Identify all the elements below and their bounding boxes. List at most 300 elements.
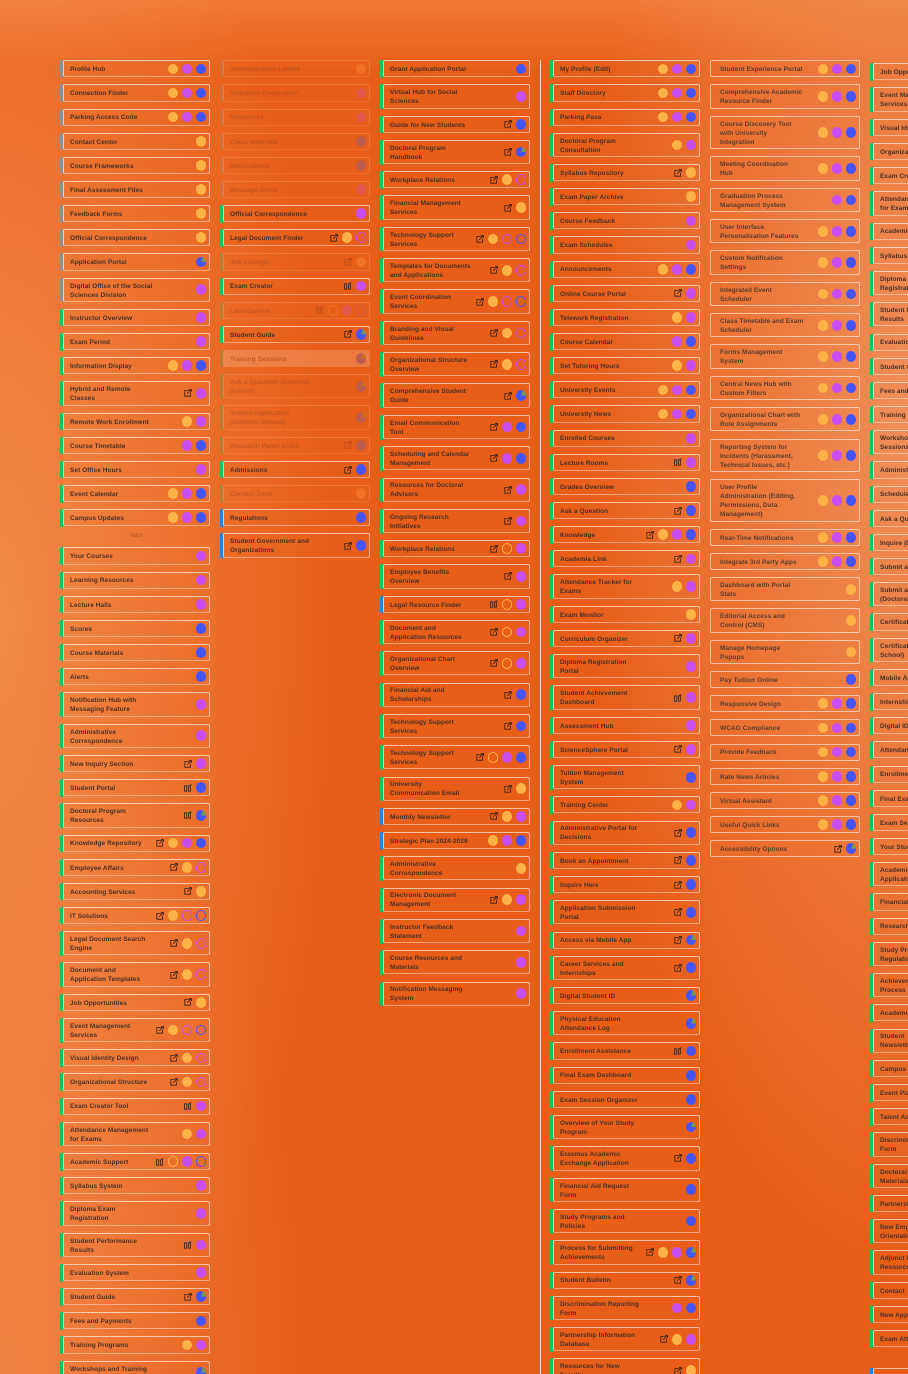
card: Discrimination Form: Form: [880, 1146, 896, 1153]
card: Attendance Management for Exams: Attendance Management: [70, 1127, 148, 1134]
card: Assessment Hub: Assessment Hub: [560, 723, 614, 730]
card: Final Exams: [873, 790, 908, 807]
card: Technology Support Services: Technology Support: [390, 232, 454, 239]
card: Exam Creator Tool: [873, 167, 908, 184]
card: Document and Application Resources: [383, 620, 530, 644]
card: Admissions: [223, 461, 370, 478]
card: Student Performance Results: Results: [70, 1247, 94, 1254]
faded card: Resources: [223, 109, 370, 126]
card: Digital ID: [873, 717, 908, 734]
card: Doctoral Program Consultation: Consultation: [560, 147, 600, 154]
faded card: Administrative Letters: Administrative Letters: [230, 66, 300, 73]
card: Process for Submitting Achievements: Process for Submitting: [560, 1245, 633, 1252]
card: Announcements: Announcements: [560, 266, 612, 273]
card: Organizational Chart Overview: Overview: [390, 665, 419, 672]
card: Academic Support: [63, 1153, 210, 1170]
card: Event Coordination Services: Services: [390, 303, 417, 310]
faded card: Research Panel SCNA: Research Panel SCNA: [230, 443, 300, 450]
card: Accessibility Options: [710, 840, 860, 857]
card: Manage Homepage Popups: Manage Homepage: [720, 645, 780, 652]
faded card: Class Materials: [223, 133, 370, 150]
card: New Inquiry Section: [63, 755, 210, 772]
faded filled card: Training Sessions: [223, 350, 370, 367]
card: IT Solutions: IT Solutions: [70, 913, 108, 920]
card: Resources for New Faculty: Resources for New: [560, 1363, 620, 1370]
card: Comprehensive Student Guide: [383, 383, 530, 408]
card: Meeting Coordination Hub: Hub: [720, 170, 733, 177]
card: Inquire Here: Inquire Here: [560, 882, 599, 889]
card: Guide for New Students: [383, 116, 530, 133]
card: Exam Schedules: Exam Schedules: [560, 242, 613, 249]
card: Career Services and Internships: [553, 956, 700, 980]
card: Technology Support Services: Services: [390, 759, 417, 766]
card: New Employee Orientation: [873, 1219, 908, 1243]
faded card: LearnSphere: [223, 302, 370, 319]
card: Inquire (Doctoral School): [873, 534, 908, 551]
card: Electronic Document Management: [383, 888, 530, 912]
card: Comprehensive Academic Resource Finder: [710, 84, 860, 109]
card: Fees and Payments: [63, 1312, 210, 1329]
card: Certificates (Doctoral School): [873, 638, 908, 662]
card: Student Guide: [63, 1288, 210, 1305]
card: Branding and Visual Guidelines: Branding and Visual: [390, 326, 454, 333]
card: Scheduling and Calendar Management: Scheduling and Calendar: [390, 451, 469, 458]
card: Study Programs and Policies: [553, 1209, 700, 1233]
card: Instructor Feedback Statement: Instructor Feedback: [390, 924, 453, 931]
card: Discrimination Reporting Form: [553, 1296, 700, 1320]
card: Reporting System for Incidents: Incidents (Harassment,: [720, 453, 793, 460]
card: Provide Feedback: Provide Feedback: [720, 749, 777, 756]
card: Remote Work Enrollment: [63, 413, 210, 430]
card: Financial Aid and Scholarships: [383, 682, 530, 707]
card: Access via Mobile App: [553, 932, 700, 949]
card: Feedback Forms: [63, 205, 210, 222]
card: Scores: Scores: [70, 626, 92, 633]
card: Doctoral Materials: Materials: [880, 1178, 908, 1185]
card: Templates for Documents and Applications: Templates for Documents: [390, 263, 471, 270]
card: Administrative Correspondence: [63, 724, 210, 748]
card: Document and Application Resources: Document and: [390, 625, 436, 632]
card: Student Achievement Dashboard: Student Achievement: [560, 690, 627, 697]
column 6: clipped features: [870, 63, 908, 1374]
card: Administrative Correspondence: Correspondence: [390, 870, 442, 877]
card: Financial Aid: [873, 893, 908, 911]
card: Dashboard with Portal Stats: Stats: [720, 591, 736, 598]
card: Dashboard with Portal Stats: Dashboard with Portal: [720, 582, 790, 589]
card: Legal Document Search Engine: Engine: [70, 945, 92, 952]
card: Your Courses: [63, 547, 210, 565]
card: Online Course Portal: [553, 285, 700, 302]
card: My Profile (Edit): [553, 60, 700, 77]
card: Certificates (Doctoral School): School): [880, 652, 904, 659]
card: Learning Resources: [63, 572, 210, 589]
card: Real-Time Notifications: Real-Time Notifications: [720, 535, 794, 542]
card: Accounting Services: [63, 883, 210, 900]
card: Workplace Relations: Workplace Relations: [390, 177, 455, 184]
card: Comprehensive Student Guide: Guide: [390, 397, 409, 404]
card: Hybrid and Remote Classes: Classes: [70, 395, 95, 402]
card: Student Government and Organizations: Organizations: [230, 547, 274, 554]
card: Course Resources and Materials: Course Resources and: [390, 955, 462, 962]
card: Study Programs and Policies: Study Programs and: [560, 1214, 625, 1221]
card: Student Government and Organizations: Student Government and: [230, 538, 309, 545]
card: WCAG Compliance: [710, 719, 860, 736]
card: Resources for New Faculty: [553, 1358, 700, 1374]
card: Electronic Document Management: Electronic Document: [390, 892, 456, 899]
card: Scheduling and Calendar Management: Management: [390, 460, 430, 467]
card: Course Feedback: [553, 212, 700, 229]
card: Overview of Your Study Program: Overview of Your Study: [560, 1120, 634, 1127]
card: Forms Management System: [710, 344, 860, 369]
card: Final Assessment Files: Final Assessment Files: [70, 187, 143, 194]
card: Organizational Structure: Organizational Structure: [70, 1079, 147, 1086]
card: Electronic Document Management: Management: [390, 901, 430, 908]
card: Erasmus Academic Exchange Application: [553, 1146, 700, 1171]
card: University Events: [553, 381, 700, 398]
card: University Communication Email: University: [390, 781, 422, 788]
card: Book an Appointment: Book an Appointment: [560, 858, 628, 865]
faded card: Submit Application (Doctoral School): [223, 405, 370, 430]
card: Class Timetable and Exam Scheduler: Scheduler: [720, 327, 752, 334]
card: Notification Hub: Messaging Feature: [70, 706, 130, 713]
card: New Inquiry Section: New Inquiry Section: [70, 761, 133, 768]
card: Visual Identity Design: [63, 1049, 210, 1066]
card: Class Timetable and Exam Scheduler: Class Timetable and Exam: [720, 318, 803, 325]
card: Workplace Relations: Workplace Relations: [390, 546, 455, 553]
faded card: Contact Zone: [223, 485, 370, 502]
card: Profile Hub: [63, 60, 210, 77]
card: Training Center: [553, 796, 700, 813]
card: Virtual Hub for Social Sciences: Virtual Hub for Social: [390, 89, 457, 96]
card: Email Communication Tool: Email Communication: [390, 420, 459, 427]
card: Your Courses: Your Courses: [70, 553, 113, 560]
card: Study Programs and Policies: Policies: [560, 1223, 585, 1230]
card: Organizational Chart Overview: Organizational Chart: [390, 656, 455, 663]
card: Exam Monitor: Exam Monitor: [560, 612, 604, 619]
card: Technology Support Services: Services: [390, 728, 417, 735]
faded card: Ask a Question (Doctoral School): Ask a Question (Doctoral: [230, 379, 309, 386]
card: Grant Application Portal: Grant Application Portal: [390, 66, 466, 73]
faded card: Notifications: [223, 157, 370, 174]
card: Administrative Correspondence: Correspondence: [70, 738, 122, 745]
faded card: Ask a Question (Doctoral School): [223, 374, 370, 398]
card: Job Opportunities: Job Opportunities: [70, 1000, 127, 1007]
card: Evaluation System: Evaluation System: [70, 1270, 129, 1277]
card: Lecture Rooms: Lecture Rooms: [560, 460, 608, 467]
card: Knowledge Repository: Knowledge Repository: [70, 840, 142, 847]
card: Administrative Correspondence: Administrative: [390, 861, 436, 868]
card: Application Submission Portal: Portal: [560, 914, 579, 921]
card: Legal Resource Finder: [383, 596, 530, 613]
card: Legal Document Finder: [223, 229, 370, 246]
card: Hybrid and Remote Classes: Hybrid and Remote: [70, 386, 131, 393]
card: Parking Pass: [553, 109, 700, 126]
card: Rate News Articles: Rate News Articles: [720, 774, 779, 781]
card: Ongoing Research Initiatives: [383, 509, 530, 533]
card: University Communication Email: Communication Email: [390, 790, 459, 797]
card: Monthly Newsletter: [383, 808, 530, 825]
card: Submit an Application (Doctoral School): [873, 582, 908, 606]
card: Admissions: Admissions: [230, 467, 267, 474]
card: Organizational Structure: [873, 143, 908, 160]
card: Course Materials: [63, 644, 210, 661]
card: Useful Quick Links: [710, 816, 860, 833]
card: User Interface Personalization Features: User Interface: [720, 224, 764, 231]
card: Enrollment Assistance: Enrollment Assistance: [560, 1048, 631, 1055]
card: Organizational Chart with Role Assignments: [710, 407, 860, 431]
card: Enrollment: [873, 766, 908, 783]
card: Knowledge Repository: [63, 835, 210, 852]
card: Set Tutoring Hours: [553, 357, 700, 374]
card: Application Portal: Application Portal: [70, 259, 127, 266]
card: User Profile Administration: [710, 479, 860, 522]
card: Technology Support Services: [383, 227, 530, 251]
card: Lecture Rooms: [553, 454, 700, 471]
card: Staff Directory: Staff Directory: [560, 90, 606, 97]
card: Student Guide: [223, 326, 370, 343]
card: Integrate 3rd Party Apps: Integrate 3rd Party Apps: [720, 559, 797, 566]
card: Graduation Process Management System: [710, 188, 860, 212]
card: Ask a Question: Ask a Question: [560, 508, 608, 515]
card: Course Frameworks: [63, 157, 210, 174]
card: User Profile Administration: Permissions, Data: [720, 502, 777, 509]
card: Organizational Structure Overview: Overview: [390, 366, 419, 373]
card: Graduation Process Management System: Graduation Process: [720, 193, 783, 200]
card: Partnership Information Database: Database: [560, 1341, 589, 1348]
faded card: Submit Application (Doctoral School): Submit Application: [230, 410, 290, 417]
card: Attendance Tracker for Exams: Exams: [560, 588, 581, 595]
card: Student Newsletter: Student: [880, 1033, 905, 1040]
card: Forms Management System: Forms Management: [720, 349, 782, 356]
card: Career Services and Internships: Internships: [560, 970, 596, 977]
card: Doctoral Program Resources: Resources: [70, 817, 104, 824]
card: Curriculum Organizer: Curriculum Organizer: [560, 636, 628, 643]
card: Physical Education Attendance Log: Physical Education: [560, 1016, 621, 1023]
card: Internships: [873, 693, 908, 710]
card: Hybrid and Remote Classes: [63, 381, 210, 406]
card: Branding and Visual Guidelines: [383, 321, 530, 345]
card: Feedback Forms: Feedback Forms: [70, 211, 122, 218]
card: Strategic Plan 2024-2029: Strategic Plan 2024-2029: [390, 838, 468, 845]
card: Employee Benefits Overview: [383, 564, 530, 589]
card: Manage Homepage Popups: Popups: [720, 654, 744, 661]
card: Achievement Process: Process: [880, 987, 906, 994]
card: Student Bulletin: Student Bulletin: [560, 1277, 611, 1284]
card: Contact: Contact: [880, 1288, 905, 1295]
card: Fees and Payments: [873, 382, 908, 399]
card: Organizational Chart with Role Assignments: Role Assignments: [720, 421, 777, 428]
card: Virtual Hub for Social Sciences: [383, 84, 530, 109]
card: Student Portal: Student Portal: [70, 785, 115, 792]
card: Student Experience Portal: [710, 60, 860, 77]
card: Exam Period: Exam Period: [70, 339, 110, 346]
card: Real-Time Notifications: [710, 529, 860, 546]
faded card: Ask a Question (Doctoral School): School): [230, 388, 254, 395]
card: Lecture Halls: [63, 596, 210, 613]
card: Enrolled Courses: Enrolled Courses: [560, 435, 615, 442]
card: Doctoral Program Resources: Doctoral Program: [70, 808, 126, 815]
card: Ongoing Research Initiatives: Initiatives: [390, 523, 421, 530]
card: Workplace Relations: [383, 171, 530, 188]
card: Financial Management Services: Services: [390, 209, 417, 216]
card: Financial Management Services: Financial Management: [390, 200, 461, 207]
card: Training Programs: [873, 406, 908, 423]
card: Official Correspondence: Official Correspondence: [70, 235, 147, 242]
card: Course Frameworks: Course Frameworks: [70, 163, 134, 170]
card: Training Programs: Training Programs: [70, 1342, 128, 1349]
card: ScienceSphere Portal: [553, 741, 700, 758]
card: Erasmus Academic Exchange Application: Exchange Application: [560, 1160, 629, 1167]
card: Career Services and Internships: Career Services and: [560, 961, 624, 968]
card: New Applicants: [873, 1306, 908, 1323]
card: University Events: University Events: [560, 387, 616, 394]
card: Enrolled Courses: [553, 430, 700, 447]
card: Final Assessment Files: [63, 181, 210, 198]
card: Event Calendar: [63, 485, 210, 502]
card: Rate News Articles: [710, 768, 860, 785]
card: Syllabus Repository: [553, 164, 700, 181]
card: Diploma Registration Portal: [553, 654, 700, 678]
card: Workshops and Training Sessions: Workshops and Training: [70, 1366, 147, 1373]
card: Course Discovery Tool: with University: [720, 130, 767, 137]
card: Book an Appointment: [553, 852, 700, 869]
faded card: Message Alerts: [223, 181, 370, 198]
card: Central News Hub with Custom Filters: Central News Hub with: [720, 381, 792, 388]
card: Financial Management Services: [383, 195, 530, 220]
card: Dashboard with Portal Stats: [710, 577, 860, 601]
card: Exam Creator: [223, 278, 370, 295]
card: Integrated Event Scheduler: [710, 282, 860, 306]
card: Student Achievement Dashboard: [553, 685, 700, 710]
card: Official Correspondence: Official Correspondence: [230, 211, 307, 218]
card: Digital Student ID: [553, 987, 700, 1004]
card: Email Communication Tool: [383, 415, 530, 439]
card: Training Center: Training Center: [560, 802, 609, 809]
card: Instructor Overview: Instructor Overview: [70, 315, 132, 322]
column 2: features: [220, 60, 370, 558]
card: Central News Hub with Custom Filters: [710, 376, 860, 400]
card: Final Exam Dashboard: Final Exam Dashboard: [560, 1072, 631, 1079]
card: Financial Aid and Scholarships: Scholarships: [390, 696, 432, 703]
card: Doctoral Program Consultation: [553, 133, 700, 157]
card: Employee Affairs: Employee Affairs: [70, 865, 124, 872]
card: WCAG Compliance: WCAG Compliance: [720, 725, 780, 732]
card: Editorial Access and Control (CMS): Control (CMS): [720, 622, 764, 629]
card: Digital Student ID: Digital Student ID: [560, 993, 615, 1000]
card: Responsive Design: [710, 695, 860, 712]
faded card: Contact Zone: Contact Zone: [230, 491, 272, 498]
card: Syllabus System: [873, 247, 908, 264]
card: Syllabus Repository: Syllabus Repository: [560, 170, 624, 177]
card: Grant Application Portal: [383, 60, 530, 77]
card: Erasmus Academic Exchange Application: Erasmus Academic: [560, 1151, 621, 1158]
card: Notification Messaging System: [383, 982, 530, 1006]
card: Financial Aid and Scholarships: Financial Aid and: [390, 687, 445, 694]
card: Technology Support Services: Technology Support: [390, 719, 454, 726]
card: Exam Paper Archive: [553, 188, 700, 205]
card: Mobile App: [873, 669, 908, 686]
card: Grades Overview: [553, 478, 700, 495]
card: Tuition Management System: [553, 765, 700, 789]
card: Grades Overview: Grades Overview: [560, 484, 614, 491]
card: Partnership Information Database: Partnership Information: [560, 1332, 635, 1339]
card: Remote Work Enrollment: Remote Work Enrollment: [70, 419, 149, 426]
card: Official Correspondence: [63, 229, 210, 246]
card: Talent Acquisition: [873, 1108, 908, 1125]
card: Telework Registration: Telework Registration: [560, 315, 629, 322]
card: Contact Center: Contact Center: [70, 139, 117, 146]
card: Monthly Newsletter: Monthly Newsletter: [390, 814, 451, 821]
card: ScienceSphere Portal: ScienceSphere Portal: [560, 747, 628, 754]
card: Digital ID: Digital ID: [880, 723, 908, 730]
card: Knowledge: [553, 526, 700, 543]
card: Graduation Process Management System: Management System: [720, 202, 786, 209]
card: Workplace Relations: [383, 540, 530, 557]
card: Application Portal: [63, 253, 210, 271]
card: Diploma Exam Registration: [63, 1201, 210, 1226]
card: Workshops and Training Sessions: [873, 430, 908, 454]
card: Process for Submitting Achievements: Achievements: [560, 1254, 605, 1261]
card: Digital Office: [63, 278, 210, 302]
card: Achievement Process: [873, 973, 908, 997]
card: Syllabus System: [63, 1177, 210, 1194]
card: Administrative Portal for Decisions: Administrative Portal for: [560, 825, 637, 832]
card: Inquire Here: [553, 876, 700, 893]
card: Academia Link: [553, 550, 700, 567]
card: Exam Schedules: [553, 236, 700, 254]
faded card: Instructor Declaration: [223, 84, 370, 102]
card: Ongoing Research Initiatives: Ongoing Research: [390, 514, 449, 521]
card: Campus News: [873, 1060, 908, 1077]
card: Parking Access Code: Parking Access Code: [70, 114, 137, 121]
card: Legal Document Search Engine: [63, 931, 210, 955]
card: Organizational Structure Overview: [383, 352, 530, 376]
card: Official Correspondence: [223, 205, 370, 222]
card: Doctoral Program Handbook: Doctoral Program: [390, 145, 446, 152]
card: Technology Support Services: [383, 714, 530, 738]
card: Online Course Portal: Online Course Portal: [560, 291, 626, 298]
card: User Interface Personalization Features: [710, 219, 860, 243]
card: Financial Aid Request Form: Form: [560, 1192, 576, 1199]
faded card: Resources: Resources: [230, 114, 264, 121]
card: Resources for Doctoral Advisors: Resources for Doctoral: [390, 482, 463, 489]
card: Custom Notification Settings: [710, 250, 860, 275]
card: Exam Period: [63, 333, 210, 350]
card: Visual Identity Design: Visual Identity Design: [70, 1055, 139, 1062]
card: Profile Hub: Profile Hub: [70, 66, 105, 73]
card: Administrative Correspondence: Administrative: [70, 729, 116, 736]
card: Employee Benefits Overview: Overview: [390, 578, 419, 585]
card: Exam Attendance: [873, 1330, 908, 1347]
card: Scores: [63, 620, 210, 637]
faded filled card: Training Sessions: Training Sessions: [230, 356, 287, 363]
card: Legal Document Search Engine: Legal Document Search: [70, 936, 145, 943]
card: Branding and Visual Guidelines: Guidelines: [390, 335, 424, 342]
card: Notification Hub: [63, 692, 210, 717]
card: Digital Office: Sciences Division: [70, 292, 126, 298]
card: Student Experience Portal: Student Experience Portal: [720, 66, 802, 73]
card: Exam Creator: Exam Creator: [230, 283, 273, 290]
card: Class Timetable and Exam Scheduler: [710, 313, 860, 337]
card: Training Programs: [63, 1336, 210, 1354]
card: Discrimination Form: [873, 1132, 908, 1157]
card: Your Study Program: [873, 838, 908, 855]
tabs separator: ↓ tabs ↓: [124, 533, 149, 539]
faded card: Message Alerts: Message Alerts: [230, 187, 278, 194]
card: Course Timetable: [63, 437, 210, 454]
faded card: LearnSphere: LearnSphere: [230, 308, 270, 315]
card: IT Solutions: [63, 907, 210, 924]
